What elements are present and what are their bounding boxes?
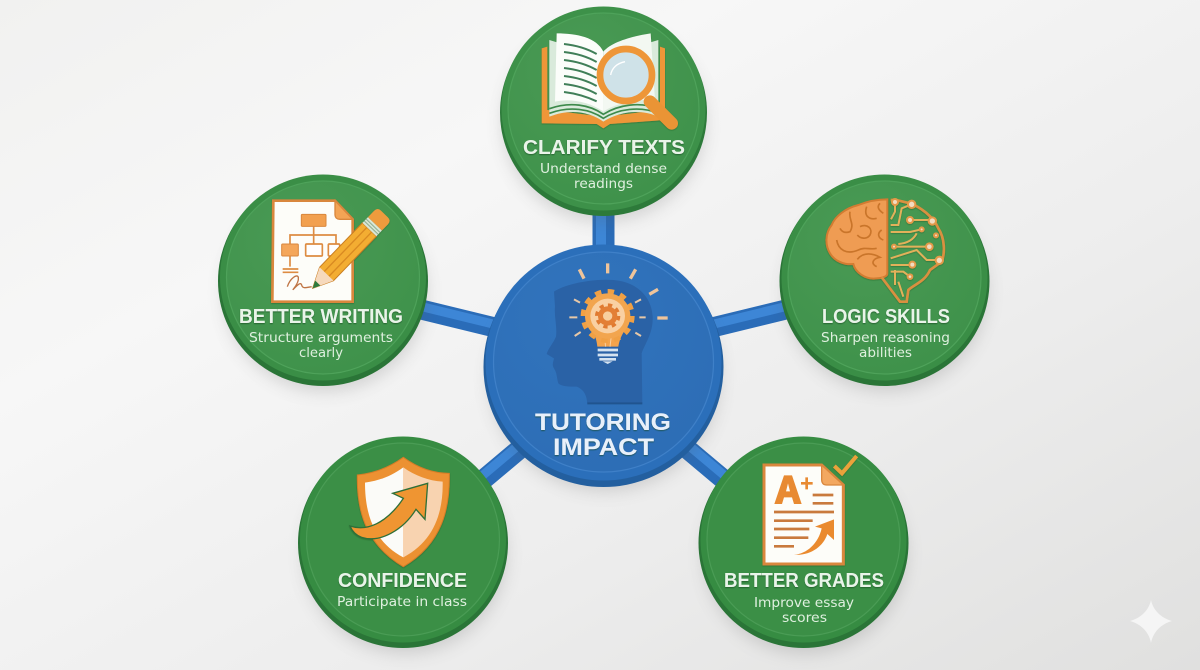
description — [249, 330, 393, 361]
panel: better writing — [218, 174, 428, 392]
description: Sharpen reasoning — [821, 330, 950, 346]
description: readings — [574, 176, 633, 192]
description: Understand dense — [540, 161, 667, 177]
description — [540, 161, 667, 192]
connector: left — [415, 305, 497, 328]
connector: lower left — [476, 439, 528, 484]
heading: CLARIFY TEXTS — [523, 137, 685, 159]
heading — [535, 409, 671, 461]
connector: right — [710, 305, 792, 328]
heading: BETTER GRADES — [724, 570, 884, 592]
description: abilities — [859, 345, 912, 361]
description — [821, 330, 950, 361]
icon: head with gear light bulb — [547, 263, 668, 403]
connector: lower right — [679, 439, 731, 484]
icon: graded paper with check — [764, 456, 857, 564]
connector: top — [601, 205, 604, 255]
heading: LOGIC SKILLS — [822, 306, 950, 328]
icon: shield with rising arrow — [350, 457, 449, 567]
panel: better grades — [698, 436, 908, 654]
connectors — [415, 205, 792, 484]
heading: CONFIDENCE — [338, 570, 467, 592]
description: clearly — [299, 345, 343, 361]
panel: confidence — [298, 436, 508, 654]
heading: IMPACT — [553, 434, 654, 461]
icon: half brain half circuit — [826, 199, 944, 302]
heading: TUTORING — [535, 409, 671, 436]
icon: open book and magnifier — [542, 33, 672, 128]
description: Improve essay — [754, 595, 854, 611]
panel: clarify texts — [500, 6, 707, 222]
description: scores — [782, 610, 827, 626]
description: Structure arguments — [249, 330, 393, 346]
panel: tutoring impact hub — [484, 244, 724, 492]
heading: BETTER WRITING — [239, 306, 403, 328]
icon: sparkle watermark — [1130, 600, 1172, 643]
description — [754, 595, 854, 626]
panel: logic skills — [780, 174, 990, 392]
description: Participate in class — [337, 594, 467, 610]
icon: document and pencil — [272, 201, 391, 302]
